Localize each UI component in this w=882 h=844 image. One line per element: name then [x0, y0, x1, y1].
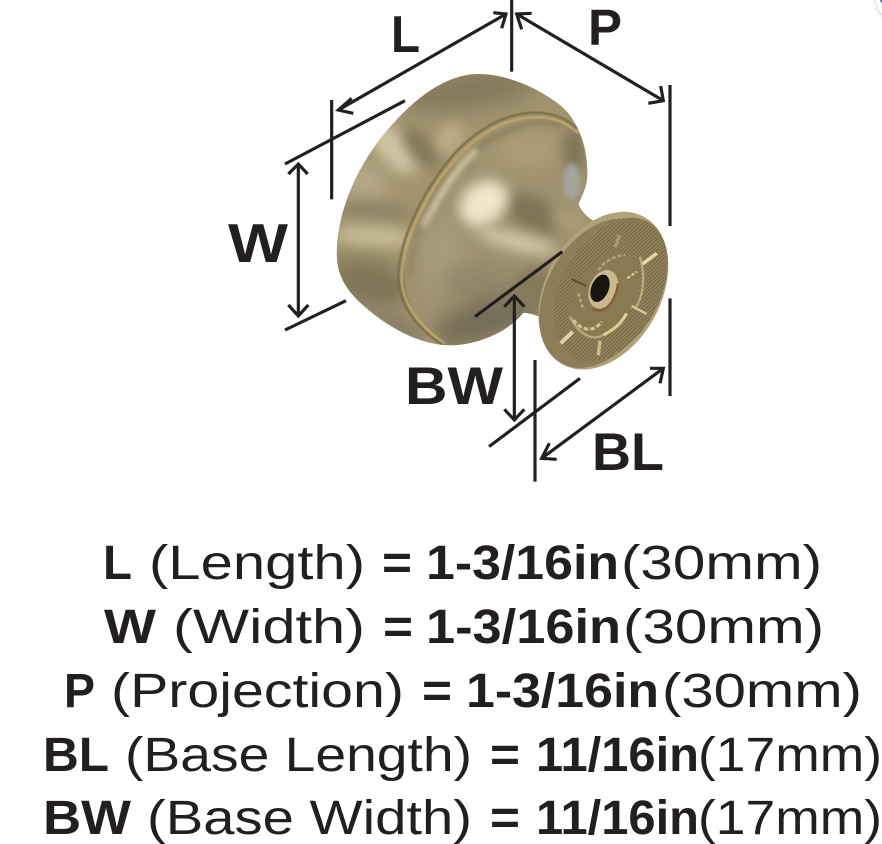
- extension lines: [285, 0, 670, 482]
- threaded hole: [583, 266, 624, 313]
- dome shading: [405, 119, 593, 346]
- spec line: length: (30mm): [621, 537, 822, 590]
- spec line: length: =: [382, 537, 412, 590]
- stamped lettering and marks: [598, 255, 625, 270]
- spec line: projection: [64, 665, 862, 718]
- base flange: [512, 189, 695, 392]
- stamped ring: [557, 240, 653, 350]
- icon: corner badge fragment: [876, 0, 882, 20]
- spec line: width: (Width): [173, 601, 365, 654]
- knob body: [336, 74, 594, 346]
- spec line: width: (30mm): [623, 601, 824, 654]
- spec line: base length: (Base Length): [125, 729, 472, 782]
- arrow: W width: [288, 164, 308, 316]
- spec line: base length: (17mm): [698, 729, 882, 782]
- diagram label: L: L: [391, 6, 420, 64]
- spec line: base width: =: [490, 792, 520, 844]
- spec line: width: [104, 601, 824, 654]
- spec line: projection: (30mm): [662, 665, 862, 718]
- spec line: length: 1-3/16in: [426, 537, 619, 590]
- spec line: width: W: [104, 601, 157, 654]
- spec line: base width: (Base Width): [147, 792, 472, 844]
- spec line: base width: BW: [43, 792, 132, 844]
- arrow: BW base width: [504, 296, 524, 420]
- arrow: BL base length: [542, 368, 663, 459]
- spec line: base length: [43, 729, 882, 782]
- spec line: width: =: [383, 601, 413, 654]
- spec line: length: (Length): [149, 537, 365, 590]
- hatched base face: [530, 198, 691, 381]
- dimension lines: [285, 0, 670, 482]
- spec line: projection: =: [422, 665, 452, 718]
- arrow: L length: [338, 13, 506, 113]
- spec line: base width: (17mm): [698, 792, 882, 844]
- spec line: length: [103, 537, 822, 590]
- outer rim shading: [407, 74, 540, 116]
- spec line: base width: [43, 792, 882, 844]
- spec line: base length: 11/16in: [536, 729, 699, 782]
- spec line: projection: 1-3/16in: [466, 665, 659, 718]
- diagram label: P: P: [588, 0, 622, 56]
- spec line: base length: BL: [43, 729, 109, 782]
- blade marks: [643, 253, 657, 264]
- spec line: projection: (Projection): [111, 665, 404, 718]
- diagram label: W: W: [228, 212, 288, 274]
- spec line: base width: 11/16in: [536, 792, 699, 844]
- knob photo illustration: [322, 62, 695, 392]
- spec line: projection: P: [64, 665, 95, 718]
- spec line: base length: =: [490, 729, 520, 782]
- spec line: width: 1-3/16in: [426, 601, 621, 654]
- specification list: [43, 537, 882, 844]
- spec line: length: L: [103, 537, 132, 590]
- ring groove: [398, 113, 577, 345]
- diagram label: BW: BW: [405, 357, 503, 416]
- diagram label: BL: BL: [592, 423, 664, 482]
- arrow: P projection: [517, 13, 663, 103]
